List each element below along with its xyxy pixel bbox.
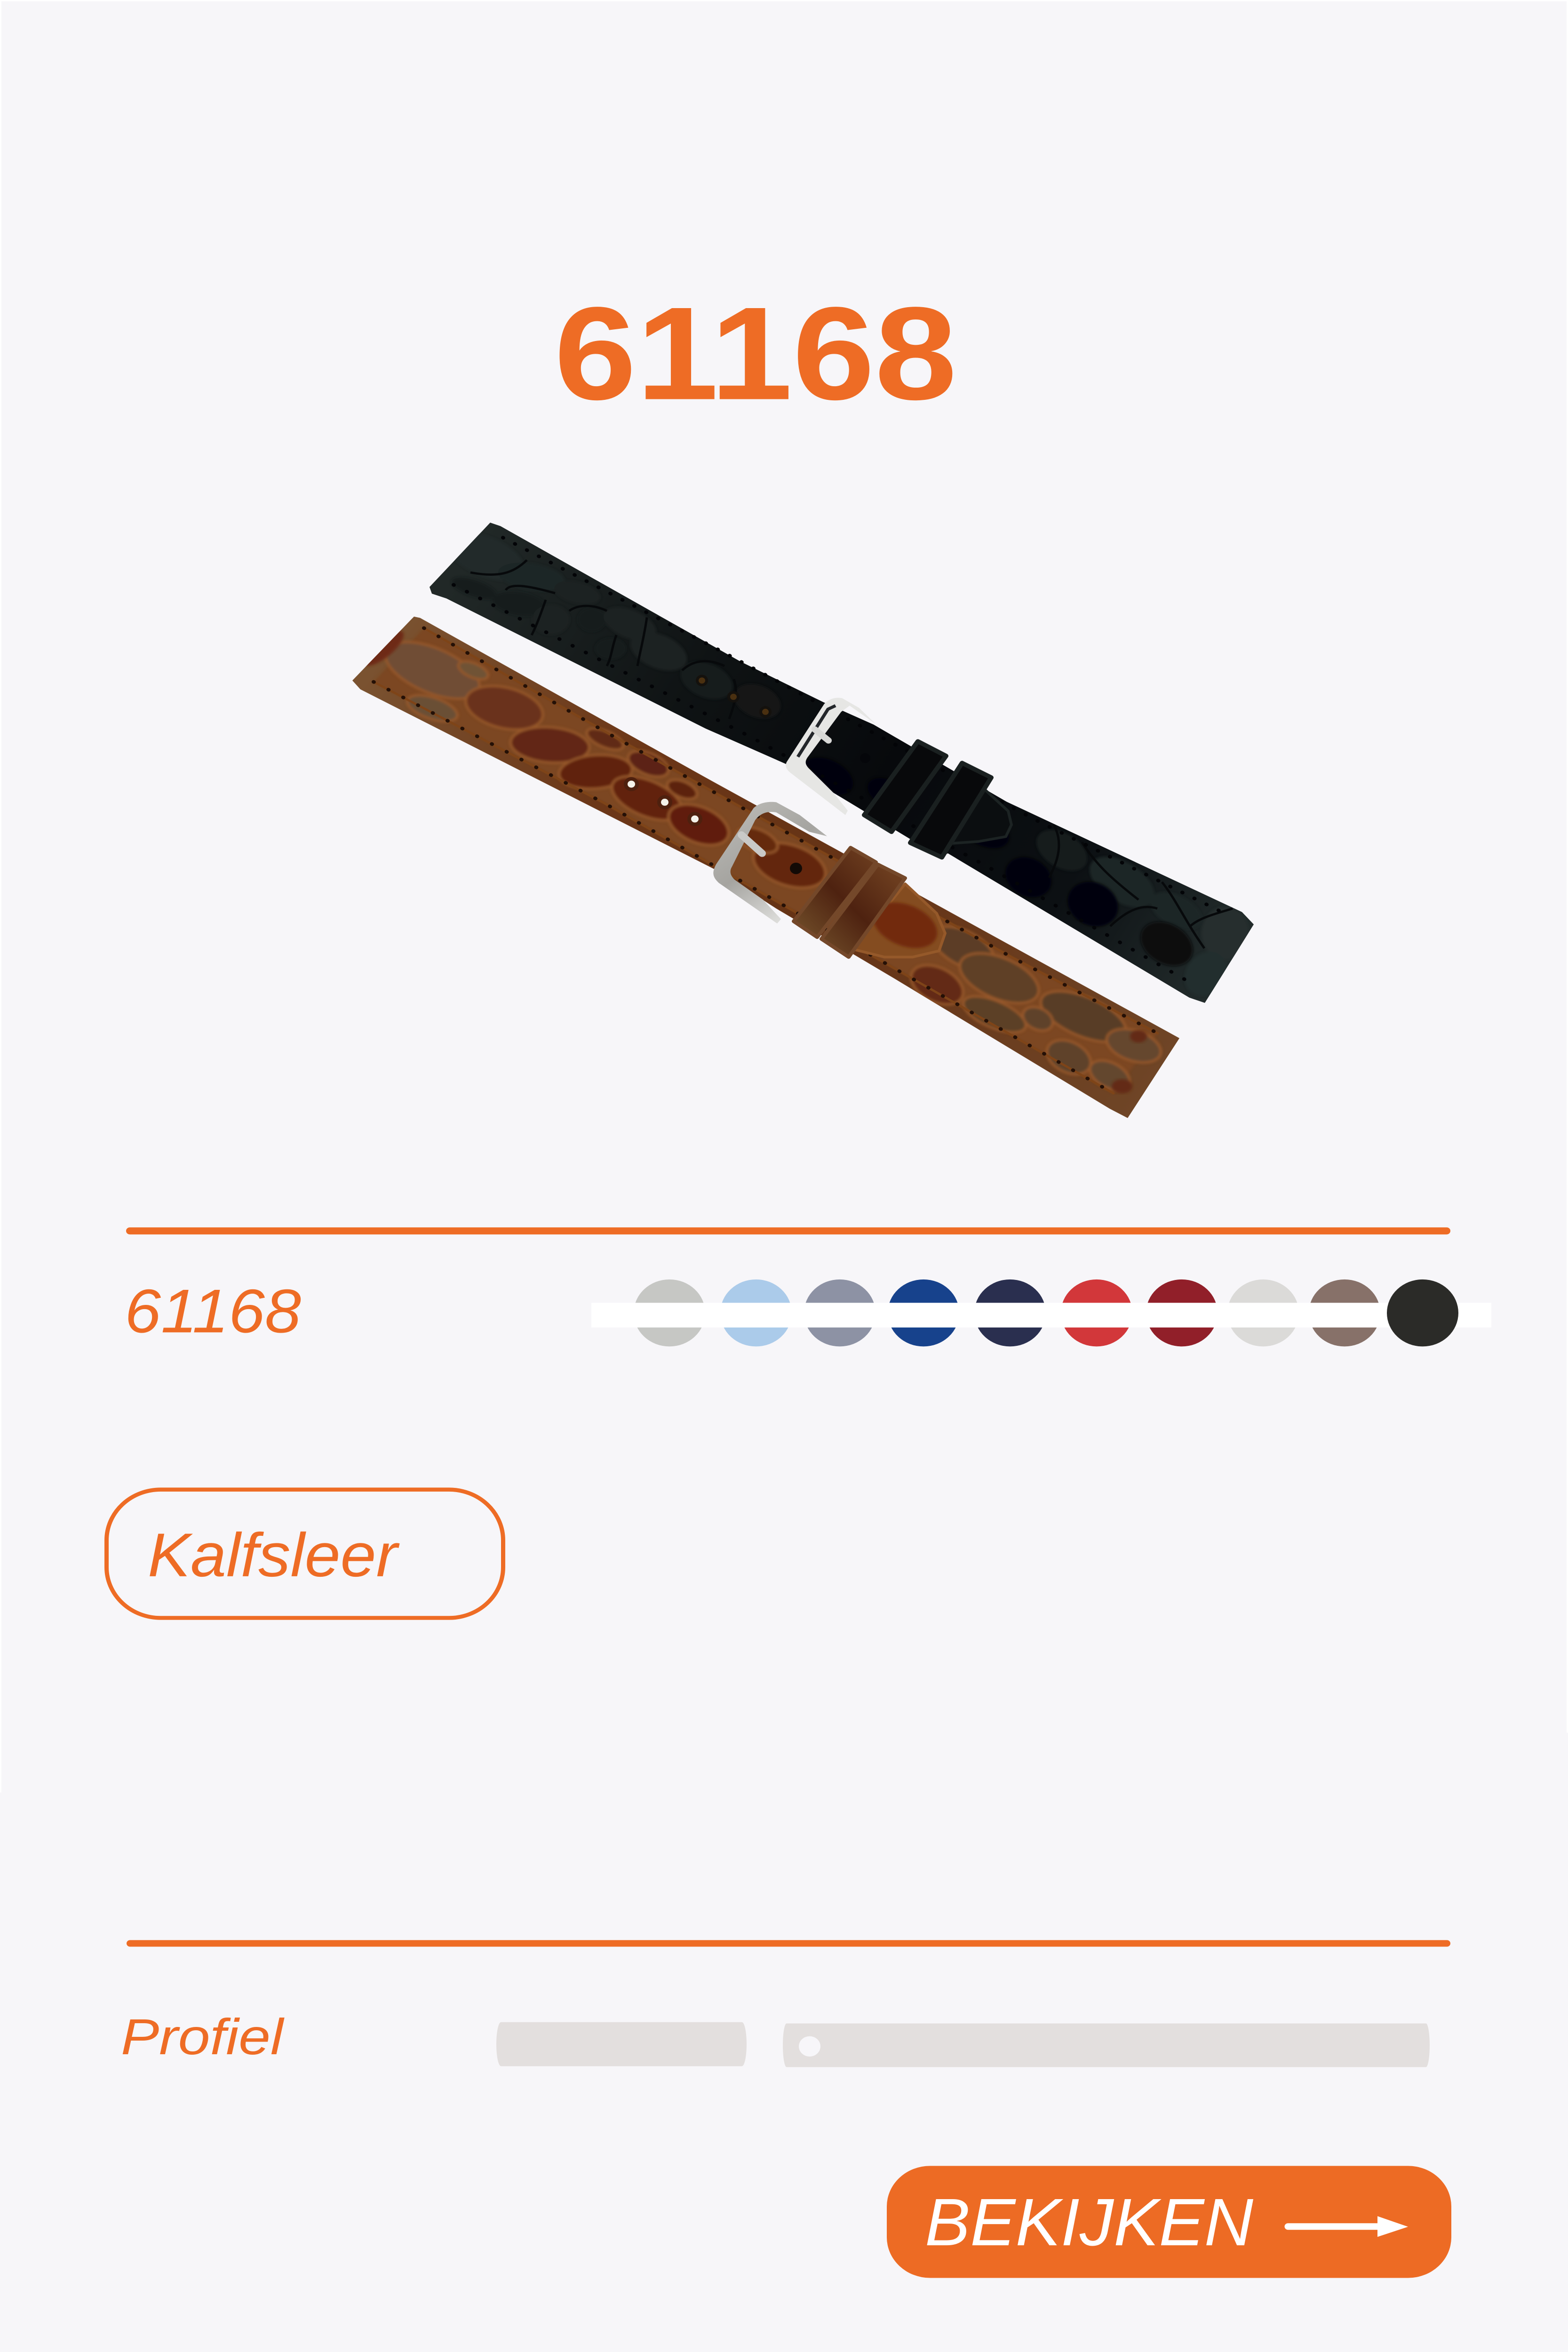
profile shape: long strap piece with hole [783,2024,1430,2067]
brown strap dark field [374,628,1158,1093]
brown strap loops [794,848,905,957]
model number: 61168 [125,1276,301,1345]
brown strap holes [624,777,802,874]
material tag: Kalfsleer [106,1490,503,1618]
black strap buckle [786,698,876,815]
black strap loops [864,741,991,858]
black strap holes [696,675,870,763]
product photo: two watch straps [352,523,1254,1118]
colour swatches [591,1279,1491,1346]
brown strap tail [852,884,945,957]
button: BEKIJKEN [887,2166,1451,2278]
black crocodile strap [430,523,1254,1003]
title: 61168 [554,279,957,427]
black strap scale cracks [470,560,1233,948]
button: BEKIJKEN: BEKIJKEN [925,2185,1254,2260]
divider top [126,1227,1450,1234]
brown strap buckle [713,802,827,923]
material tag: Kalfsleer: Kalfsleer [148,1520,400,1589]
profile shape: short strap piece [496,2022,747,2066]
brown crocodile strap [352,617,1179,1118]
profile label: Profiel [121,2008,285,2065]
divider bottom [127,1940,1450,1947]
black strap stitching [454,538,1226,980]
brown strap stitching [374,628,1158,1093]
black strap tail [947,776,1011,844]
icon: arrow [1284,2216,1408,2237]
